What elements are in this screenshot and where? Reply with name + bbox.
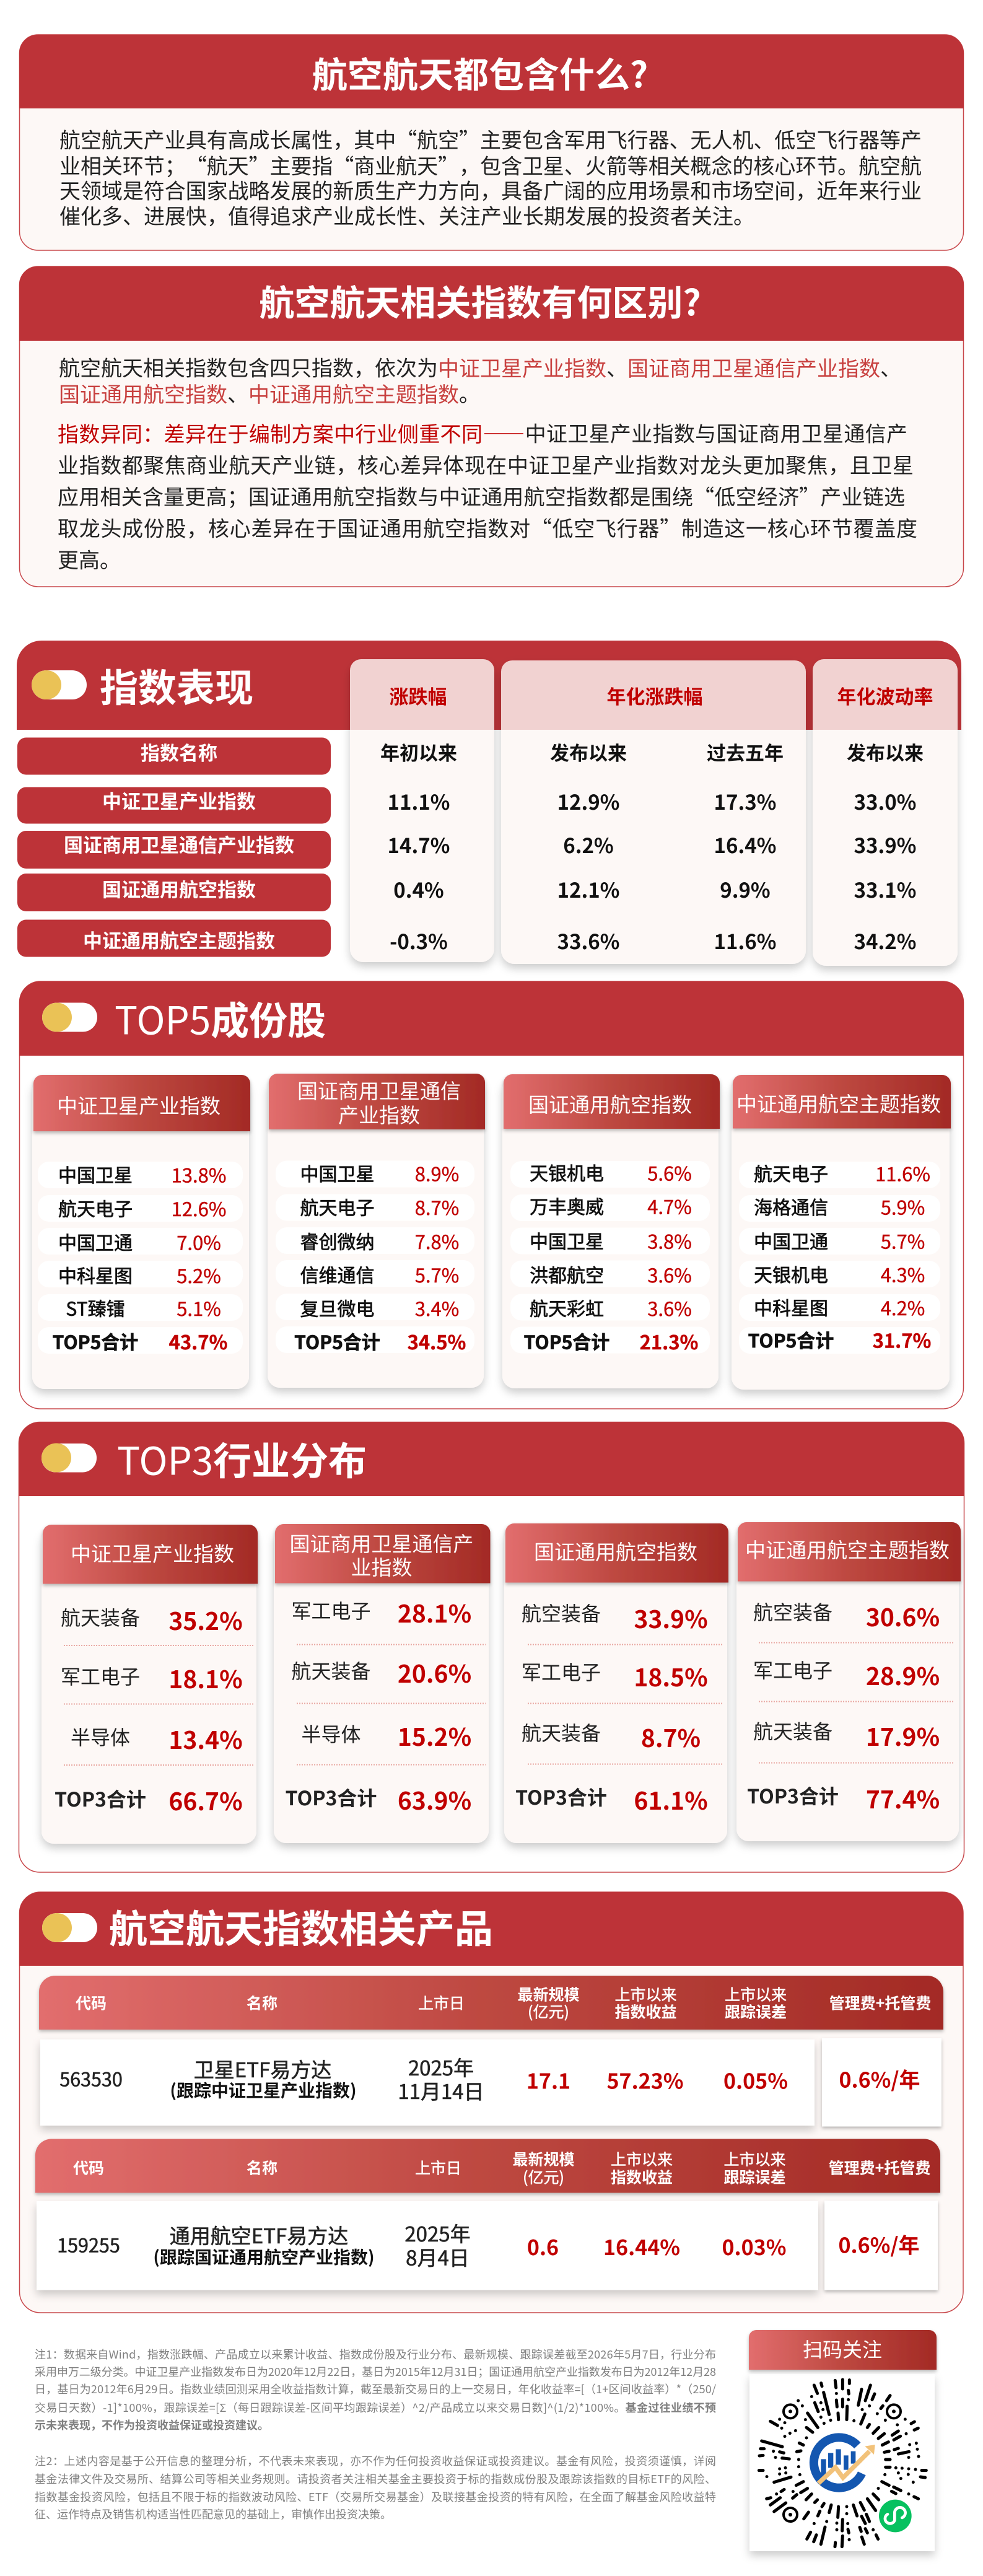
table: general aviation ETF: (亿元) — [523, 2166, 564, 2188]
card: CSI general aviation theme: 17.9% — [866, 1719, 940, 1753]
card: CSI satellite: 航天电子 — [58, 1194, 133, 1221]
table: satellite ETF: 卫星ETF易方达 — [194, 2054, 331, 2083]
card: CNI general aviation: 8.7% — [641, 1720, 701, 1755]
icon: toggle — [42, 1444, 97, 1472]
card: CNI commercial satellite: 15.2% — [398, 1719, 471, 1753]
card: CNI commercial satellite: 8.7% — [415, 1193, 459, 1220]
text block: aerospace description: 催化多、进展快，值得追求产业成长性、关注产业长期发展的投资者关注。 — [59, 200, 754, 230]
text block: similarities and differences: 业指数都聚焦商业航天产业链，核心差异体现在中证卫星产业指数对龙头更加聚焦，且卫星 — [58, 449, 914, 480]
column: annualised volatility: 发布以来 — [847, 738, 924, 766]
card: CNI general aviation: 万丰奥威 — [530, 1192, 604, 1219]
text block: note 1 — [35, 2346, 716, 2433]
table: satellite ETF: 管理费+托管费 — [829, 1992, 931, 2014]
card: CNI general aviation: 33.9% — [634, 1601, 708, 1636]
card: CNI general aviation: 21.3% — [640, 1327, 698, 1355]
heading: what aerospace includes: 航空航天都包含什么? — [312, 47, 648, 98]
table: general aviation ETF: 跟踪误差 — [723, 2166, 786, 2188]
card: CNI commercial satellite: 睿创微纳 — [300, 1227, 374, 1254]
card: CNI commercial satellite: 半导体 — [301, 1719, 361, 1748]
card: CNI commercial satellite — [268, 1074, 485, 1388]
card: CSI general aviation theme — [732, 1075, 951, 1390]
card: CSI satellite: 7.0% — [177, 1227, 221, 1255]
table: satellite ETF: 上市以来 — [725, 1983, 787, 2005]
column: change — [350, 659, 494, 962]
text block: note 1: 交易日天数）-1]*100%，跟踪误差=[Σ（每日跟踪误差-区间平均跟踪误差）^2/产品成立以来交易日数]^(1/2)*100%。基金过往业绩不预 — [35, 2399, 716, 2416]
table: satellite ETF: 指数收益 — [614, 2000, 677, 2023]
card: CNI general aviation: 5.6% — [647, 1158, 692, 1186]
card: CSI general aviation theme: 航天装备 — [753, 1717, 832, 1745]
text block: aerospace description: 航空航天产业具有高成长属性，其中“航空”主要包含军用飞行器、无人机、低空飞行器等产 — [59, 124, 922, 154]
column: annualised change: 6.2% — [563, 830, 614, 859]
table: general aviation ETF: 16.44% — [603, 2231, 680, 2261]
column: annualised volatility: 33.0% — [854, 786, 916, 816]
card: CSI satellite: 5.1% — [177, 1294, 221, 1321]
text block: aerospace description: 业相关环节；“航天”主要指“商业航天”，包含卫星、火箭等相关概念的核心环节。航空航 — [59, 150, 922, 180]
text block: note 2: 基金法律文件及交易所、结算公司等相关业务规则。请投资者关注相关基金主要投资于标的指数成份股及跟踪该指数的目标ETF的风险、 — [35, 2471, 716, 2487]
text block: four indices: 航空航天相关指数包含四只指数，依次为中证卫星产业指数、国证商用卫星通信产业指数、 — [59, 352, 901, 382]
table: general aviation ETF: 0.6 — [527, 2231, 559, 2261]
heading: related products: 航空航天指数相关产品 — [109, 1898, 493, 1954]
card: CSI general aviation theme: 77.4% — [866, 1781, 940, 1816]
card: CNI general aviation: 国证通用航空指数 — [534, 1536, 697, 1566]
icon: toggle — [32, 670, 87, 699]
table: general aviation ETF: 最新规模 — [512, 2148, 575, 2170]
card: CSI satellite — [42, 1525, 258, 1844]
table: general aviation ETF: 指数收益 — [611, 2166, 673, 2188]
text block: note 2 — [35, 2453, 716, 2522]
column: change: 年初以来 — [380, 738, 457, 766]
table: general aviation ETF: 159255 — [57, 2230, 120, 2258]
card: CNI commercial satellite: 20.6% — [398, 1655, 471, 1690]
column: annualised change: 11.6% — [714, 926, 776, 955]
table: satellite ETF: 最新规模 — [517, 1983, 580, 2005]
text block: similarities and differences — [58, 418, 917, 574]
card: CNI commercial satellite: 34.5% — [408, 1327, 466, 1355]
column: annualised change: 33.6% — [557, 926, 619, 955]
text block: aerospace description: 天领域是符合国家战略发展的新质生产力方向，具备广阔的应用场景和市场空间，近年来行业 — [59, 175, 922, 205]
panel: what aerospace includes — [19, 35, 964, 250]
row labels — [17, 737, 331, 957]
table: satellite ETF: 0.6%/年 — [839, 2064, 920, 2094]
column: annualised change: 年化涨跌幅 — [607, 681, 702, 709]
card: CNI commercial satellite: 8.9% — [415, 1159, 459, 1186]
column: annualised change: 16.4% — [714, 830, 776, 859]
panel: top 3 sectors — [19, 1422, 964, 1872]
card: CNI general aviation: 航空装备 — [522, 1598, 601, 1627]
card: CNI commercial satellite: 3.4% — [415, 1294, 459, 1321]
card: CSI general aviation theme — [736, 1522, 961, 1841]
icon: mini program code — [759, 2380, 926, 2547]
card: CSI satellite: 35.2% — [168, 1603, 243, 1637]
card: CNI commercial satellite: TOP3合计 — [286, 1783, 377, 1812]
card: CNI commercial satellite: 航天装备 — [291, 1656, 371, 1684]
card: CNI general aviation: 中国卫星 — [530, 1227, 604, 1254]
table: general aviation ETF: 0.6%/年 — [838, 2229, 920, 2259]
table: general aviation ETF: (跟踪国证通用航空产业指数) — [153, 2244, 375, 2269]
card: CNI commercial satellite: 军工电子 — [291, 1596, 371, 1624]
card: CNI commercial satellite: 28.1% — [398, 1595, 471, 1630]
card: CSI general aviation theme: 中证通用航空主题指数 — [736, 1088, 941, 1118]
card: CSI general aviation theme: 30.6% — [866, 1599, 940, 1634]
text block: note 1: 示未来表现，不作为投资收益保证或投资建议。 — [35, 2417, 269, 2433]
card: CSI satellite: 中国卫星 — [58, 1160, 133, 1188]
card: CNI commercial satellite: 业指数 — [351, 1551, 413, 1581]
table: satellite ETF: 17.1 — [526, 2065, 570, 2095]
section header bar — [17, 641, 961, 730]
card: CSI satellite: 中科星图 — [58, 1261, 133, 1288]
card: CNI commercial satellite: 7.8% — [415, 1227, 459, 1255]
card: CSI satellite: 军工电子 — [61, 1662, 140, 1690]
card: CNI commercial satellite: 国证商用卫星通信 — [297, 1075, 461, 1105]
card: CNI general aviation: 军工电子 — [522, 1657, 601, 1686]
column: change: 涨跌幅 — [389, 681, 447, 709]
column: annualised change: 9.9% — [720, 874, 771, 904]
text block: note 2: 征、运作特点及销售机构适当性匹配意见的基础上，审慎作出投资决策。 — [35, 2506, 391, 2522]
card: CSI satellite: 航天装备 — [61, 1603, 140, 1631]
icon: toggle — [42, 1913, 97, 1942]
card: CNI general aviation: 4.7% — [647, 1191, 692, 1219]
row labels: 国证通用航空指数 — [102, 874, 256, 902]
column: annualised change: 17.3% — [714, 786, 776, 816]
heading: scan to follow: 扫码关注 — [803, 2334, 882, 2363]
text block: note 1: 注1：数据来自Wind，指数涨跌幅、产品成立以来累计收益、指数成份股及行业分布、最新规模、跟踪误差截至2026年5月7日，行业分布 — [35, 2346, 716, 2362]
card: CSI general aviation theme: 5.7% — [881, 1226, 925, 1254]
column: annualised change: 发布以来 — [550, 738, 627, 766]
row labels: 国证商用卫星通信产业指数 — [64, 830, 294, 857]
card: CNI general aviation: 洪都航空 — [530, 1260, 604, 1287]
table: general aviation ETF: 8月4日 — [406, 2242, 470, 2272]
card: CSI satellite: TOP3合计 — [55, 1784, 146, 1813]
heading: index differences: 航空航天相关指数有何区别? — [259, 275, 701, 326]
icon: toggle — [42, 1002, 97, 1032]
card: CNI general aviation: TOP5合计 — [524, 1327, 609, 1354]
text block: aerospace description — [59, 124, 922, 230]
card: CSI satellite: 13.8% — [172, 1160, 226, 1188]
heading: index performance: 指数表现 — [100, 657, 253, 713]
table: general aviation ETF: 代码 — [73, 2157, 104, 2179]
card: CNI general aviation: 61.1% — [634, 1782, 708, 1817]
row labels: 中证卫星产业指数 — [102, 786, 256, 814]
card: CNI general aviation: 18.5% — [634, 1659, 708, 1694]
table: satellite ETF: 11月14日 — [398, 2075, 484, 2105]
card: CSI satellite — [32, 1075, 250, 1389]
card: CSI general aviation theme: TOP5合计 — [748, 1326, 834, 1353]
card: CSI general aviation theme: TOP3合计 — [747, 1781, 839, 1810]
card: CSI general aviation theme: 28.9% — [866, 1658, 940, 1693]
card: CNI general aviation — [502, 1074, 720, 1388]
text block: note 1: 日，基日为2012年6月29日。指数业绩回测采用全收益指数计算，截至最新交易日的上一交易日，年化收益率=[（1+区间收益率）*（250/ — [35, 2381, 716, 2397]
column: change: 0.4% — [393, 874, 444, 904]
card: CSI general aviation theme: 航空装备 — [753, 1597, 832, 1626]
table: satellite ETF: 563530 — [59, 2064, 123, 2092]
card: CSI satellite: TOP5合计 — [53, 1327, 138, 1354]
column: change: 11.1% — [388, 786, 450, 816]
column: annualised change: 过去五年 — [707, 738, 784, 766]
card: CNI general aviation: 航天彩虹 — [530, 1294, 604, 1321]
text block: similarities and differences: 更高。 — [58, 544, 121, 574]
card: CSI satellite: 66.7% — [168, 1783, 243, 1818]
table: satellite ETF: 57.23% — [606, 2065, 684, 2095]
card: CSI satellite: 12.6% — [172, 1194, 226, 1222]
card: CSI satellite: 5.2% — [177, 1261, 221, 1289]
table: satellite ETF: (跟踪中证卫星产业指数) — [170, 2077, 357, 2102]
card: CNI general aviation: 3.6% — [647, 1294, 692, 1321]
card: CSI general aviation theme: 中证通用航空主题指数 — [745, 1534, 950, 1564]
table: general aviation ETF: 2025年 — [404, 2218, 471, 2248]
card: CSI general aviation theme: 5.9% — [881, 1192, 925, 1220]
card: CNI general aviation: TOP3合计 — [515, 1782, 607, 1811]
card: CSI general aviation theme: 海格通信 — [754, 1193, 828, 1220]
panel: top 5 constituents — [19, 981, 964, 1409]
table: general aviation ETF: 名称 — [247, 2157, 277, 2179]
card: CNI commercial satellite: 中国卫星 — [300, 1159, 374, 1186]
table: general aviation ETF: 0.03% — [722, 2231, 786, 2261]
table: satellite ETF: (亿元) — [528, 2000, 569, 2023]
column: annualised volatility: 34.2% — [854, 926, 916, 955]
text block: similarities and differences: 应用相关含量更高；国证通用航空指数与中证通用航空指数都是围绕“低空经济”产业链选 — [58, 481, 905, 511]
card: CNI general aviation: 国证通用航空指数 — [528, 1089, 692, 1118]
table: general aviation ETF: 上市以来 — [611, 2148, 673, 2170]
table: satellite ETF: 2025年 — [408, 2052, 474, 2082]
card: CSI general aviation theme: 4.3% — [881, 1260, 925, 1287]
column: change: -0.3% — [390, 926, 448, 955]
card: CNI commercial satellite: 产业指数 — [338, 1099, 420, 1129]
card: CSI satellite: 中国卫通 — [58, 1228, 133, 1255]
card: CSI satellite: ST臻镭 — [66, 1294, 125, 1321]
table: general aviation ETF: 管理费+托管费 — [829, 2157, 930, 2179]
card: CNI commercial satellite: 航天电子 — [300, 1193, 374, 1220]
table: satellite ETF: 0.05% — [723, 2065, 788, 2095]
column: annualised change: 12.9% — [557, 786, 619, 816]
table: satellite ETF: 代码 — [76, 1992, 107, 2014]
card: CSI general aviation theme: 11.6% — [875, 1159, 930, 1186]
heading: top 3 sectors: TOP3行业分布 — [117, 1430, 367, 1486]
table: satellite ETF: 上市日 — [418, 1992, 465, 2014]
column: annualised volatility — [813, 659, 958, 966]
text block: note 2: 指数基金投资风险，包括且不限于标的指数波动风险、ETF（交易所交易基金）及联接基金投资的特有风险，在全面了解基金风险收益特 — [35, 2489, 716, 2505]
card: CSI general aviation theme: 中国卫通 — [754, 1227, 828, 1254]
card: CNI commercial satellite: 63.9% — [398, 1782, 471, 1817]
column: annualised change — [501, 660, 806, 964]
card: CSI satellite: 43.7% — [169, 1327, 227, 1355]
text block: similarities and differences: 取龙头成份股，核心差异在于国证通用航空指数对“低空飞行器”制造这一核心环节覆盖度 — [58, 512, 917, 543]
row labels: 指数名称 — [141, 738, 217, 766]
card: CSI general aviation theme: 军工电子 — [753, 1655, 832, 1684]
card: CNI commercial satellite: 国证商用卫星通信产 — [290, 1528, 473, 1557]
card: CSI general aviation theme: 31.7% — [873, 1325, 931, 1353]
table: general aviation ETF: 上市以来 — [723, 2148, 786, 2170]
card: CSI satellite: 中证卫星产业指数 — [71, 1538, 234, 1567]
card: CSI general aviation theme: 中科星图 — [754, 1293, 828, 1320]
table: satellite ETF: 名称 — [247, 1992, 277, 2014]
text block: four indices — [59, 352, 901, 408]
card: CNI commercial satellite: 复旦微电 — [300, 1294, 374, 1321]
card: CNI commercial satellite: 5.7% — [415, 1260, 459, 1288]
card: CSI general aviation theme: 航天电子 — [754, 1159, 828, 1186]
text block: similarities and differences: 指数异同：差异在于编制方案中行业侧重不同——中证卫星产业指数与国证商用卫星通信产 — [58, 418, 907, 448]
panel: index differences — [19, 266, 964, 587]
column: change: 14.7% — [388, 830, 450, 859]
card: CNI general aviation — [504, 1523, 728, 1843]
text block: note 1: 采用申万二级分类。中证卫星产业指数发布日为2020年12月22日，基日为2015年12月31日；国证通用航空产业指数发布日为2012年12月28 — [35, 2364, 716, 2380]
column: annualised volatility: 年化波动率 — [837, 681, 933, 709]
table: general aviation ETF: 上市日 — [415, 2157, 461, 2179]
card: CNI general aviation: 天银机电 — [530, 1159, 604, 1186]
table: satellite ETF: 上市以来 — [614, 1983, 677, 2005]
card: CSI general aviation theme: 4.2% — [881, 1293, 925, 1321]
card: CNI general aviation: 3.6% — [647, 1260, 692, 1288]
card: CNI general aviation: 3.8% — [647, 1226, 692, 1254]
card: CSI satellite: 18.1% — [168, 1661, 243, 1696]
panel: QR code — [749, 2330, 937, 2551]
card: CNI general aviation: 航天装备 — [522, 1718, 601, 1746]
row labels: 中证通用航空主题指数 — [83, 926, 275, 953]
card: CNI commercial satellite — [274, 1524, 491, 1843]
card: CSI satellite: 中证卫星产业指数 — [57, 1090, 221, 1119]
column: annualised volatility: 33.9% — [854, 830, 916, 859]
text block: four indices: 国证通用航空指数、中证通用航空主题指数。 — [59, 378, 480, 408]
column: annualised volatility: 33.1% — [854, 874, 916, 904]
card: CNI commercial satellite: 信维通信 — [300, 1260, 374, 1287]
heading: top 5 constituents: TOP5成份股 — [115, 990, 326, 1046]
card: CSI satellite: 13.4% — [168, 1722, 243, 1756]
panel: related products — [19, 1892, 963, 2313]
table: general aviation ETF: 通用航空ETF易方达 — [170, 2220, 348, 2250]
card: CNI commercial satellite: TOP5合计 — [294, 1327, 380, 1354]
table: satellite ETF — [39, 1976, 943, 2126]
column: annualised change: 12.1% — [557, 874, 619, 904]
card: CSI satellite: 半导体 — [71, 1722, 130, 1751]
table: satellite ETF: 跟踪误差 — [725, 2000, 787, 2023]
card: CSI general aviation theme: 天银机电 — [754, 1260, 828, 1287]
text block: note 2: 注2：上述内容是基于公开信息的整理分析，不代表未来表现，亦不作为任何投资收益保证或投资建议。基金有风险，投资须谨慎，详阅 — [35, 2453, 716, 2469]
panel: index performance — [17, 641, 961, 966]
table: general aviation ETF — [35, 2139, 940, 2290]
